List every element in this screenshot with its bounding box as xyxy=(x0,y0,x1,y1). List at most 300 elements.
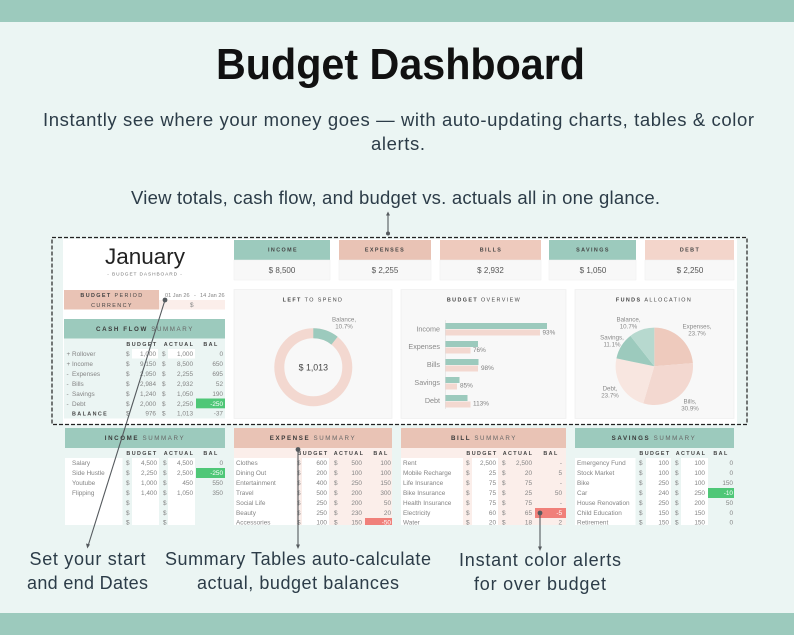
table: expense summary: 100 xyxy=(351,470,362,477)
table: bill summary: 75 xyxy=(489,480,496,487)
panel: cash flow summary: $ xyxy=(126,401,130,408)
bar chart: 76% xyxy=(473,347,486,354)
card: savings: $ 1,050 xyxy=(580,266,607,275)
panel: cash flow summary: $ xyxy=(162,371,166,378)
table: expense summary: 20 xyxy=(384,510,391,517)
table: income summary: $ xyxy=(163,490,167,497)
table: savings summary: $ xyxy=(675,470,679,477)
table: income summary: $ xyxy=(126,460,130,467)
table: expense summary: 230 xyxy=(351,510,362,517)
table: income summary: Youtube xyxy=(72,480,96,487)
table: bill summary: - xyxy=(560,460,562,467)
table: savings summary: $ xyxy=(639,470,643,477)
table: expense summary: Social Life xyxy=(236,500,266,507)
table: bill summary: - xyxy=(560,480,562,487)
table: income summary: 1,400 xyxy=(141,490,157,497)
table: bill summary: BILL SUMMARY xyxy=(451,435,517,442)
panel: budget period: $ xyxy=(190,302,194,309)
table: expense summary: $ xyxy=(297,470,301,477)
table: savings summary: 150 xyxy=(694,520,705,526)
table: bill summary: $ xyxy=(466,480,470,487)
panel: funds allocation: 10.7% xyxy=(620,324,638,330)
table: income summary: 1,000 xyxy=(141,480,157,487)
table: savings summary: $ xyxy=(675,490,679,497)
table: expense summary: 500 xyxy=(316,490,327,497)
table: savings summary: Stock Market xyxy=(577,470,615,477)
panel: cash flow summary: $ xyxy=(126,361,130,368)
table: savings summary: 100 xyxy=(658,460,669,467)
table: savings summary: SAVINGS SUMMARY xyxy=(612,435,696,442)
table: savings summary: BUDGET xyxy=(639,451,671,457)
dashed highlight frame xyxy=(52,238,747,424)
table: expense summary: 500 xyxy=(351,460,362,467)
bottom band xyxy=(0,613,794,635)
panel: cash flow summary: 976 xyxy=(145,410,156,418)
table: savings summary: ACTUAL xyxy=(676,451,706,457)
caption: dates xyxy=(27,549,148,593)
panel: left to spend: Balance, xyxy=(332,316,356,324)
table: bill summary: 75 xyxy=(489,500,496,507)
table: income summary: INCOME SUMMARY xyxy=(105,435,185,442)
card: income: $ 8,500 xyxy=(269,266,296,275)
donut chart xyxy=(279,333,347,401)
panel: cash flow summary: BALANCE xyxy=(72,412,108,418)
subtitle: alerts. xyxy=(371,133,425,154)
table: expense summary: $ xyxy=(297,490,301,497)
panel: left to spend: $ 1,013 xyxy=(299,362,328,372)
table: bill summary: 5 xyxy=(558,470,562,477)
table: income summary: 2,250 xyxy=(141,470,157,477)
table: expense summary: $ xyxy=(334,490,338,497)
table: bill summary: 2,500 xyxy=(480,460,496,467)
panel: cash flow summary: 2,950 xyxy=(140,371,156,378)
table: expense summary: 250 xyxy=(316,510,327,517)
panel: funds allocation: 23.7% xyxy=(601,392,619,400)
caption: color alerts: for over budget xyxy=(474,574,606,594)
panel: left to spend xyxy=(234,290,392,418)
table: expense summary: BUDGET xyxy=(297,451,329,457)
table: savings summary: 150 xyxy=(658,520,669,526)
table: income summary: $ xyxy=(163,480,167,487)
table: income summary: $ xyxy=(126,520,130,526)
card: debt: $ 2,250 xyxy=(677,266,704,275)
table: income summary: 0 xyxy=(219,460,223,467)
table: bill summary: $ xyxy=(466,460,470,467)
panel: cash flow summary: $ xyxy=(162,361,166,368)
panel: cash flow summary: Savings xyxy=(72,391,95,398)
caption: color alerts xyxy=(459,550,621,594)
table: savings summary: House Renovation xyxy=(577,500,630,507)
caption: summary tables xyxy=(165,549,431,593)
table: savings summary: 100 xyxy=(694,480,705,487)
table: bill summary: $ xyxy=(466,470,470,477)
table: savings summary: 100 xyxy=(658,470,669,477)
table: bill summary: BAL xyxy=(543,451,559,457)
table: bill summary: 25 xyxy=(489,470,496,477)
panel: month heading: January xyxy=(105,244,186,269)
panel: cash flow summary: BAL xyxy=(203,342,219,348)
panel: cash flow summary: -37 xyxy=(214,410,223,418)
table: bill summary: 65 xyxy=(525,510,532,517)
card: income: INCOME xyxy=(268,248,298,254)
table: income summary: 2,500 xyxy=(177,470,193,477)
panel: left to spend: 10.7% xyxy=(335,324,353,330)
table: income summary xyxy=(65,428,225,526)
panel: budget period: 01 Jan 26 xyxy=(165,293,190,299)
card: bills: BILLS xyxy=(480,248,502,254)
table: expense summary: $ xyxy=(334,500,338,507)
panel: cash flow summary xyxy=(64,319,225,418)
panel: cash flow summary: $ xyxy=(126,371,130,378)
table: bill summary: Electricity xyxy=(403,510,431,517)
top caption: View totals, cash flow, and budget vs. actuals all in one glance. xyxy=(131,187,660,208)
panel: budget period: CURRENCY xyxy=(91,303,133,309)
panel: cash flow summary: 1,000 xyxy=(140,351,156,358)
panel: cash flow summary: 2,255 xyxy=(177,371,193,378)
panel: left to spend: LEFT TO SPEND xyxy=(283,298,343,304)
table: expense summary: $ xyxy=(334,460,338,467)
table: savings summary: 0 xyxy=(729,510,733,517)
arrow: to summary tables xyxy=(296,447,300,549)
bar chart xyxy=(408,320,556,409)
panel: cash flow summary: $ xyxy=(126,351,130,358)
table: income summary: BUDGET xyxy=(126,451,158,457)
panel: budget period: 14 Jan 26 xyxy=(200,293,225,299)
table: savings summary: $ xyxy=(675,500,679,507)
panel: funds allocation: Debt, xyxy=(603,386,618,392)
panel: cash flow summary: BUDGET xyxy=(126,342,158,348)
table: savings summary: $ xyxy=(675,460,679,467)
table: bill summary: 18 xyxy=(525,520,532,526)
table: expense summary: $ xyxy=(297,500,301,507)
table: bill summary: - xyxy=(560,500,562,507)
panel: cash flow summary: $ xyxy=(162,391,166,398)
table: bill summary: Life Insurance xyxy=(403,480,444,487)
table: income summary: $ xyxy=(163,500,167,507)
panel: cash flow summary: $ xyxy=(126,381,130,388)
panel: cash flow summary: -250 xyxy=(210,401,223,408)
table: savings summary: 150 xyxy=(658,510,669,517)
arrow: to color alerts xyxy=(538,511,542,551)
table: income summary: $ xyxy=(126,480,130,487)
table: bill summary: $ xyxy=(502,520,506,526)
panel: cash flow summary: 8,500 xyxy=(177,361,193,368)
table: income summary: 4,500 xyxy=(177,460,193,467)
panel: cash flow summary: - xyxy=(66,371,69,378)
panel: cash flow summary: $ xyxy=(162,401,166,408)
table: savings summary: 250 xyxy=(658,480,669,487)
bar chart: Savings xyxy=(414,378,440,387)
table: bill summary: 75 xyxy=(489,490,496,497)
caption: summary tables: actual, budget balances xyxy=(197,573,399,593)
panel: funds allocation: 11.1% xyxy=(603,342,621,348)
panel: funds allocation: Balance, xyxy=(616,316,641,324)
bar chart: Debt xyxy=(425,396,440,405)
table: expense summary: ACTUAL xyxy=(334,451,364,457)
table: expense summary: Entertainment xyxy=(236,480,276,487)
panel: cash flow summary: 695 xyxy=(212,371,223,378)
table: bill summary: 50 xyxy=(555,490,562,497)
table: savings summary xyxy=(575,428,734,526)
top band xyxy=(0,0,794,22)
table: expense summary: 600 xyxy=(316,460,327,467)
panel: cash flow summary: + xyxy=(66,351,70,358)
table: income summary: 350 xyxy=(212,490,223,497)
panel: cash flow summary: 9,150 xyxy=(140,361,156,368)
table: income summary: Flipping xyxy=(72,490,95,497)
panel: cash flow summary: Rollover xyxy=(72,351,96,358)
table: bill summary: $ xyxy=(466,520,470,526)
table: savings summary: 0 xyxy=(729,520,733,526)
table: income summary: $ xyxy=(163,470,167,477)
panel: cash flow summary: $ xyxy=(162,410,166,418)
table: savings summary: 240 xyxy=(658,490,669,497)
table: savings summary: 0 xyxy=(729,470,733,477)
table: savings summary: Car xyxy=(577,490,588,497)
table: expense summary: $ xyxy=(297,480,301,487)
table: expense summary: 100 xyxy=(380,470,391,477)
panel: cash flow summary: 1,013 xyxy=(177,410,193,418)
table: bill summary: Water xyxy=(403,520,421,526)
panel: cash flow summary: 0 xyxy=(219,351,223,358)
table: expense summary: 100 xyxy=(380,460,391,467)
bar chart: Expenses xyxy=(408,342,440,351)
table: bill summary: 20 xyxy=(525,470,532,477)
panel: cash flow summary: 2,932 xyxy=(177,381,193,388)
arrow: to dates xyxy=(86,298,167,548)
table: savings summary: 250 xyxy=(658,500,669,507)
table: income summary: $ xyxy=(163,510,167,517)
subtitle xyxy=(43,109,754,154)
table: expense summary: 150 xyxy=(351,520,362,526)
panel: funds allocation: 30.9% xyxy=(681,406,699,412)
table: expense summary: 400 xyxy=(316,480,327,487)
table: expense summary: 100 xyxy=(316,520,327,526)
table: expense summary: $ xyxy=(297,520,301,526)
card: expenses xyxy=(339,240,431,280)
table: expense summary: $ xyxy=(334,510,338,517)
panel: cash flow summary: CASH FLOW SUMMARY xyxy=(96,326,194,333)
table: expense summary: 200 xyxy=(351,500,362,507)
table: expense summary: Travel xyxy=(236,490,254,497)
table: savings summary: $ xyxy=(675,480,679,487)
card: savings: SAVINGS xyxy=(576,248,610,254)
table: savings summary: Child Education xyxy=(577,510,622,517)
table: bill summary: 75 xyxy=(525,480,532,487)
table: savings summary: $ xyxy=(639,520,643,526)
panel: cash flow summary: - xyxy=(66,391,69,398)
table: expense summary: 300 xyxy=(380,490,391,497)
table: bill summary: Health Insurance xyxy=(403,500,452,507)
table: savings summary: $ xyxy=(639,490,643,497)
table: income summary: $ xyxy=(163,460,167,467)
table: savings summary: 100 xyxy=(694,470,705,477)
table: expense summary: -50 xyxy=(382,520,391,526)
table: savings summary: 0 xyxy=(729,460,733,467)
table: bill summary: $ xyxy=(502,470,506,477)
panel: funds allocation xyxy=(575,290,734,418)
pie chart xyxy=(616,328,693,405)
table: income summary: $ xyxy=(126,510,130,517)
panel: cash flow summary: - xyxy=(66,401,69,408)
table: bill summary: $ xyxy=(466,500,470,507)
table: savings summary: 250 xyxy=(694,490,705,497)
table: income summary: $ xyxy=(126,470,130,477)
table: bill summary: Mobile Recharge xyxy=(403,470,452,477)
table: expense summary: 200 xyxy=(316,470,327,477)
bar chart: 98% xyxy=(481,365,494,372)
panel: cash flow summary: ACTUAL xyxy=(164,342,194,348)
table: bill summary: -5 xyxy=(556,510,562,517)
table: savings summary: $ xyxy=(639,460,643,467)
panel: budget overview: BUDGET OVERVIEW xyxy=(447,298,521,304)
panel: funds allocation: Expenses, xyxy=(683,324,712,330)
table: savings summary: $ xyxy=(639,500,643,507)
table: bill summary: $ xyxy=(502,490,506,497)
caption: summary tables: Summary Tables auto-calculate xyxy=(165,549,431,569)
table: savings summary: 150 xyxy=(694,510,705,517)
panel: cash flow summary: $ xyxy=(126,410,130,418)
table: income summary: ACTUAL xyxy=(164,451,194,457)
table: expense summary: EXPENSE SUMMARY xyxy=(270,435,356,442)
table: savings summary: BAL xyxy=(713,451,729,457)
panel: cash flow summary: Expenses xyxy=(72,371,100,378)
table: expense summary: $ xyxy=(297,460,301,467)
table: income summary: $ xyxy=(163,520,167,526)
table: bill summary: $ xyxy=(466,510,470,517)
subtitle: Instantly see where your money goes — with auto-updating charts, tables & color xyxy=(43,109,754,130)
table: income summary: 1,050 xyxy=(177,490,193,497)
panel: cash flow summary: Bills xyxy=(72,381,84,388)
panel: cash flow summary: 52 xyxy=(216,381,223,388)
card: expenses: $ 2,255 xyxy=(372,266,399,275)
table: expense summary: 150 xyxy=(380,480,391,487)
panel: cash flow summary: 1,240 xyxy=(140,391,156,398)
table: income summary: $ xyxy=(126,490,130,497)
card: bills: $ 2,932 xyxy=(477,266,504,275)
table: savings summary: -10 xyxy=(724,490,733,497)
panel: funds allocation: FUNDS ALLOCATION xyxy=(616,298,692,304)
bar chart: 85% xyxy=(460,382,473,390)
panel: month heading: - BUDGET DASHBOARD - xyxy=(107,272,183,278)
table: bill summary: ACTUAL xyxy=(503,451,533,457)
dashboard white area xyxy=(63,239,737,424)
card: expenses: EXPENSES xyxy=(365,248,405,254)
panel: cash flow summary: $ xyxy=(126,391,130,398)
table: savings summary: Emergency Fund xyxy=(577,460,626,467)
panel: budget period: - xyxy=(194,293,196,299)
table: savings summary: $ xyxy=(639,510,643,517)
panel: cash flow summary: 650 xyxy=(212,361,223,368)
table: income summary: 450 xyxy=(182,480,193,487)
card: savings xyxy=(549,240,636,280)
table: expense summary: $ xyxy=(334,480,338,487)
table: savings summary: $ xyxy=(675,520,679,526)
table: bill summary: BUDGET xyxy=(466,451,498,457)
bar chart: Bills xyxy=(427,360,440,369)
table: bill summary: Bike Insurance xyxy=(403,490,446,497)
card: income xyxy=(234,240,330,280)
table: expense summary: 250 xyxy=(316,500,327,507)
panel: cash flow summary: 1,050 xyxy=(177,391,193,398)
panel: cash flow summary: 2,000 xyxy=(140,401,156,408)
title: Budget Dashboard xyxy=(216,40,585,89)
table: expense summary: Accessories xyxy=(236,520,270,526)
caption: dates: and end Dates xyxy=(27,573,148,593)
table: expense summary: $ xyxy=(334,470,338,477)
table: bill summary: 2,500 xyxy=(516,460,532,467)
table: savings summary: 50 xyxy=(726,500,733,507)
table: expense summary: 50 xyxy=(384,500,391,507)
panel: budget period xyxy=(64,290,225,310)
panel: cash flow summary: Debt xyxy=(72,401,86,408)
panel: cash flow summary: 1,000 xyxy=(177,351,193,358)
table: savings summary: 200 xyxy=(694,500,705,507)
table: income summary: -250 xyxy=(210,470,223,477)
table: savings summary: $ xyxy=(675,510,679,517)
table: bill summary: 20 xyxy=(489,520,496,526)
table: income summary: BAL xyxy=(203,451,219,457)
table: bill summary: $ xyxy=(502,480,506,487)
caption: color alerts: Instant color alerts xyxy=(459,550,621,570)
table: bill summary: $ xyxy=(502,500,506,507)
table: income summary: Salary xyxy=(72,460,91,467)
panel: cash flow summary: 190 xyxy=(212,391,223,398)
table: expense summary: Beauty xyxy=(236,510,257,517)
table: savings summary: 150 xyxy=(722,480,733,487)
table: savings summary: Bike xyxy=(577,480,590,487)
table: expense summary: 250 xyxy=(351,480,362,487)
table: expense summary: BAL xyxy=(373,451,389,457)
caption: dates: Set your start xyxy=(30,549,146,569)
table: income summary: $ xyxy=(126,500,130,507)
bar chart: Income xyxy=(416,324,440,334)
table: bill summary: 25 xyxy=(525,490,532,497)
table: bill summary xyxy=(401,428,566,526)
table: bill summary: 2 xyxy=(558,520,562,526)
table: savings summary: Retirement xyxy=(577,520,608,526)
table: expense summary: Clothes xyxy=(236,460,258,467)
panel: funds allocation: Bills, xyxy=(683,398,697,406)
table: bill summary: Rent xyxy=(403,460,417,467)
bar chart: 93% xyxy=(542,330,556,336)
table: income summary: 4,500 xyxy=(141,460,157,467)
table: bill summary: 75 xyxy=(525,500,532,507)
card: debt: DEBT xyxy=(680,248,700,254)
card: debt xyxy=(645,240,734,280)
panel: funds allocation: Savings, xyxy=(600,334,624,342)
table: income summary: 550 xyxy=(212,480,223,487)
table: bill summary: $ xyxy=(502,460,506,467)
table: bill summary: $ xyxy=(502,510,506,517)
arrow: to top caption xyxy=(386,212,390,236)
panel: budget period: BUDGET PERIOD xyxy=(80,293,144,299)
panel: cash flow summary: + xyxy=(66,361,70,368)
panel: cash flow summary: Income xyxy=(72,361,93,368)
panel: cash flow summary: - xyxy=(66,381,69,388)
card: bills xyxy=(440,240,541,280)
table: expense summary: Dining Out xyxy=(236,470,266,477)
table: bill summary: $ xyxy=(466,490,470,497)
table: savings summary: $ xyxy=(639,480,643,487)
table: expense summary xyxy=(234,428,392,526)
table: income summary: Side Hustle xyxy=(72,470,105,477)
bar chart: 113% xyxy=(473,400,489,408)
panel: cash flow summary: 2,250 xyxy=(177,401,193,408)
table: expense summary: $ xyxy=(334,520,338,526)
panel: budget overview xyxy=(401,290,566,418)
panel: cash flow summary: 2,984 xyxy=(140,381,156,388)
